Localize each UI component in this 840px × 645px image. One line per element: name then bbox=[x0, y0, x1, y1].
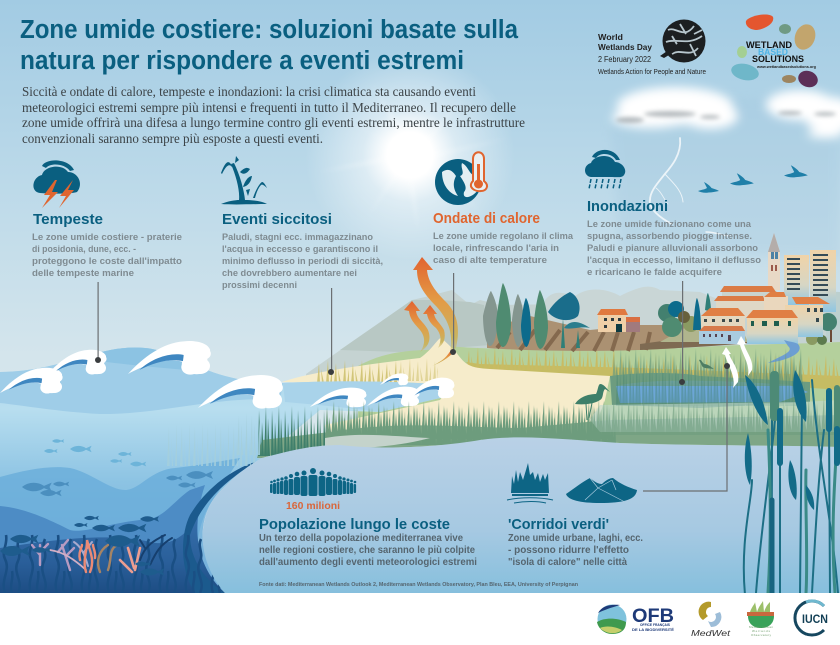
intro text: zone umide offrirà una difesa a lungo termine contro gli eventi estremi, mentre le infrastrutture bbox=[22, 115, 525, 130]
logo: MedWet bbox=[691, 602, 731, 638]
logo: OFB bbox=[597, 604, 675, 634]
corals bbox=[32, 535, 172, 572]
text: Eventi siccitosi: prossimi decenni bbox=[222, 280, 297, 291]
farmhouse bbox=[597, 309, 640, 332]
text: Eventi siccitosi: che dovrebbero aumentare nei bbox=[222, 268, 357, 279]
small heron bbox=[699, 360, 714, 369]
logo: IUCN: IUCN bbox=[802, 614, 828, 626]
logo: Mediterranean Wetlands Observatory: Wetlands bbox=[752, 629, 770, 633]
steam arrows bbox=[722, 336, 752, 388]
icon: globe with thermometer bbox=[435, 152, 487, 205]
text: Eventi siccitosi: l'acqua in eccesso e garantiscono il bbox=[222, 244, 378, 255]
icon: dry plant bbox=[221, 156, 267, 204]
text: Popolazione: Un terzo della popolazione mediterranea vive bbox=[259, 533, 464, 544]
logo: Wetland Based Solutions bbox=[730, 14, 820, 90]
distant mountains bbox=[306, 287, 840, 380]
logo: Mediterranean Wetlands Observatory bbox=[747, 601, 774, 637]
logo: IUCN bbox=[795, 601, 828, 635]
text: Tempeste: proteggono le coste dall'impatto bbox=[32, 256, 182, 267]
clouds and storm bbox=[610, 87, 840, 260]
coastal reeds bbox=[235, 399, 616, 456]
text: Inondazioni: Paludi e pianure alluvionali assorbono bbox=[587, 243, 758, 254]
yellow marsh grass band bbox=[466, 344, 840, 390]
sea bbox=[0, 347, 452, 593]
source note: Fonte dati: Mediterranean Wetlands Outlook 2, Mediterranean Wetlands Observatory, Plan Bleu, EEA, University of Perpignan bbox=[259, 582, 578, 588]
dune grass bbox=[316, 355, 438, 383]
sand beach and dune bbox=[282, 338, 610, 445]
intro text: convenzionali saranno sempre più esposte a questi eventi. bbox=[22, 131, 323, 146]
logo: Wetland Based Solutions: BASED bbox=[758, 47, 788, 57]
farm fields bbox=[487, 316, 760, 351]
intro text bbox=[22, 84, 525, 146]
logo: World Wetlands Day: Wetlands Day bbox=[598, 42, 652, 52]
logo: World Wetlands Day bbox=[598, 20, 706, 76]
heat arrows bbox=[404, 257, 458, 366]
wetland pond bbox=[590, 346, 840, 435]
text: Corridoi verdi bbox=[508, 533, 643, 568]
icon: crowd bbox=[270, 468, 356, 496]
text: Tempeste: Le zone umide costiere - praterie bbox=[32, 232, 182, 243]
text: Eventi siccitosi: Paludi, stagni ecc. immagazzinano bbox=[222, 232, 373, 243]
icon: rain cloud bbox=[585, 150, 625, 189]
waves bbox=[0, 341, 454, 409]
title bbox=[20, 16, 519, 75]
birds bbox=[698, 165, 808, 193]
blue lower panel bbox=[203, 437, 840, 593]
text: Inondazioni: Le zone umide funzionano come una bbox=[587, 219, 752, 230]
logo: MedWet: MedWet bbox=[691, 628, 731, 638]
kelp bbox=[0, 527, 224, 593]
heading: Eventi siccitosi: Eventi siccitosi bbox=[222, 211, 332, 228]
town bbox=[699, 233, 836, 363]
text: Tempeste: di posidonia, dune, ecc. - bbox=[32, 244, 136, 255]
foreground reeds bbox=[744, 370, 840, 595]
icon: storm cloud bbox=[33, 160, 80, 208]
logo: Wetland Based Solutions: www.wetlandbasedsolutions.org bbox=[756, 65, 816, 69]
figure: 160 milioni: 160 milioni bbox=[286, 500, 340, 512]
text: Ondate di calore: caso di alte temperature bbox=[433, 255, 547, 266]
text: Tempeste bbox=[32, 232, 182, 279]
text: Eventi siccitosi bbox=[222, 232, 383, 291]
text: Inondazioni: l'acqua in eccesso, limitano il deflusso bbox=[587, 255, 761, 266]
title: Zone umide costiere: soluzioni basate sulla bbox=[20, 16, 519, 44]
title: natura per rispondere a eventi estremi bbox=[20, 47, 464, 75]
text: Ondate di calore: locale, rinfrescando l'aria in bbox=[433, 243, 559, 254]
sea surface bands bbox=[0, 347, 452, 414]
icon: urban wetland reeds bbox=[507, 463, 553, 503]
text: Popolazione: nelle regioni costiere, che saranno le più colpite bbox=[259, 545, 476, 556]
heading: Corridoi verdi: 'Corridoi verdi' bbox=[508, 516, 609, 533]
text: Corridoi verdi: Zone umide urbane, laghi, ecc. bbox=[508, 533, 643, 544]
logo: World Wetlands Day: 2 February 2022 bbox=[598, 55, 651, 64]
text: Inondazioni: e ricaricano le falde acquifere bbox=[587, 267, 722, 278]
stork bbox=[575, 384, 610, 420]
sun glow bbox=[305, 50, 515, 260]
text: Corridoi verdi: - possono ridurre l'effetto bbox=[508, 545, 629, 556]
text: Popolazione bbox=[259, 533, 477, 568]
white footer bbox=[0, 593, 840, 645]
logo: Wetland Based Solutions: SOLUTIONS bbox=[752, 54, 804, 64]
text: Inondazioni bbox=[587, 219, 761, 278]
intro text: Siccità e ondate di calore, tempeste e inondazioni: la crisi climatica sta causando eventi bbox=[22, 84, 476, 99]
heading: Inondazioni: Inondazioni bbox=[587, 198, 668, 215]
submerged reeds bbox=[165, 420, 265, 466]
text: Corridoi verdi: "isola di calore" nelle città bbox=[508, 557, 628, 568]
heading: Popolazione lungo le coste: Popolazione lungo le coste bbox=[259, 516, 450, 533]
logo: Mediterranean Wetlands Observatory: Mediterranean bbox=[749, 625, 773, 629]
text: Ondate di calore bbox=[433, 231, 574, 266]
green field bbox=[358, 342, 840, 450]
text: Inondazioni: spugna, assorbendo piogge intense. bbox=[587, 231, 752, 242]
text: Popolazione: dall'aumento degli eventi meteorologici estremi bbox=[259, 557, 477, 568]
logo: World Wetlands Day: World bbox=[598, 32, 623, 42]
logo: OFB: DE LA BIODIVERSITÉ bbox=[632, 627, 675, 632]
logo: OFB: OFFICE FRANÇAIS bbox=[640, 623, 671, 627]
trees bbox=[483, 283, 837, 349]
logo: OFB: OFB bbox=[632, 606, 674, 627]
fish bbox=[0, 439, 213, 576]
marsh green ground bbox=[257, 415, 840, 458]
logo: Mediterranean Wetlands Observatory: Observatory bbox=[751, 633, 772, 637]
heading: Tempeste: Tempeste bbox=[33, 211, 103, 228]
lightning bolt bbox=[650, 138, 730, 236]
text: Eventi siccitosi: minimo deflusso in periodi di siccità, bbox=[222, 256, 383, 267]
logo: Wetland Based Solutions: WETLAND bbox=[746, 40, 793, 50]
text: Tempeste: delle tempeste marine bbox=[32, 268, 134, 279]
icon: dunes bbox=[566, 478, 637, 503]
text: Ondate di calore: Le zone umide regolano il clima bbox=[433, 231, 574, 242]
heading: Ondate di calore: Ondate di calore bbox=[433, 210, 540, 227]
logo: World Wetlands Day: Wetlands Action for People and Nature bbox=[598, 69, 706, 76]
intro text: meteorologici estremi sempre più intensi e frequenti in tutto il Mediterraneo. Il recupero delle bbox=[22, 100, 516, 115]
leader lines bbox=[95, 273, 730, 491]
underwater layers bbox=[0, 458, 255, 593]
